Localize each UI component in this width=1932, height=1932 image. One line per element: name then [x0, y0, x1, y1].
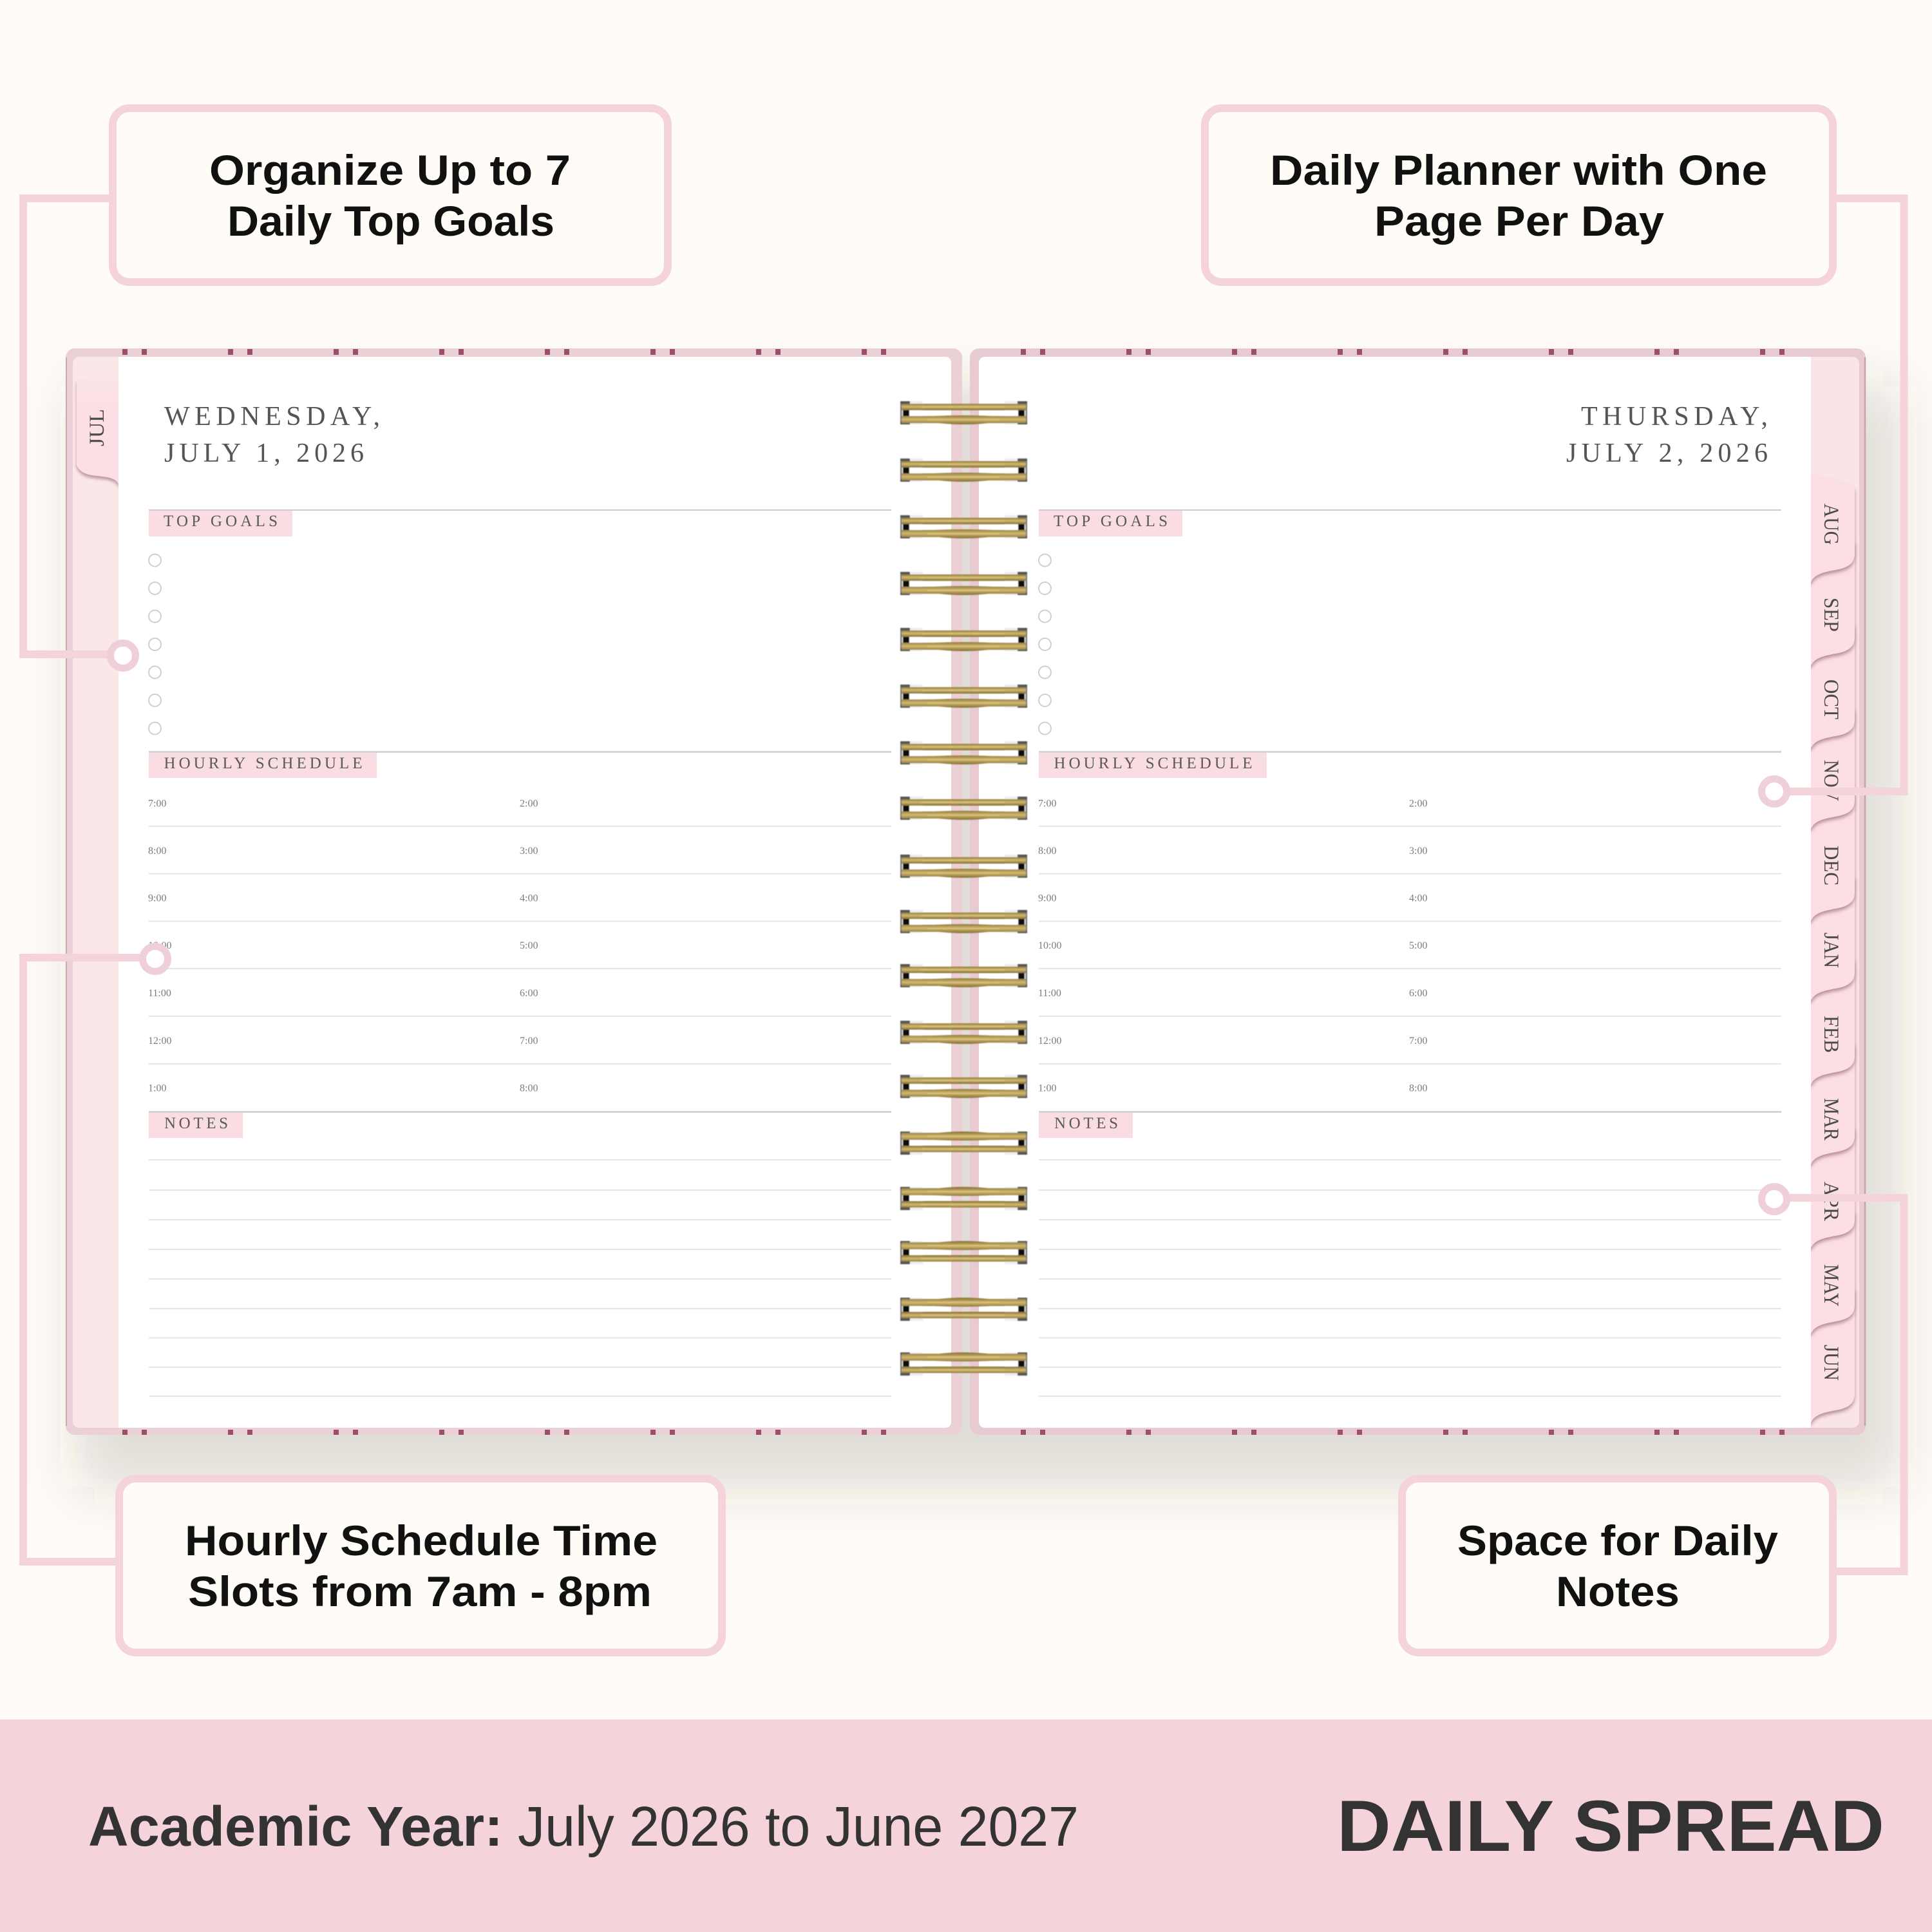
connector: hourly schedule callout to time slots [23, 947, 167, 1562]
tab labels: OCT [1819, 679, 1842, 719]
section: hourly schedule [148, 752, 891, 1094]
callout: top goals: Daily Top Goals [227, 197, 554, 245]
tab: JAN [1806, 876, 1855, 1001]
right tab strip [1803, 357, 1859, 1428]
section: hourly schedule: 2:00 [1409, 799, 1427, 809]
date heading: THURSDAY, [1581, 402, 1768, 431]
section: hourly schedule: 8:00 [1409, 1083, 1427, 1094]
section: hourly schedule: 6:00 [520, 988, 538, 999]
date heading: JULY 1, 2026 [164, 439, 364, 468]
month tabs [1806, 475, 1855, 1423]
tab: AUG [1806, 475, 1855, 582]
left tab strip [73, 357, 129, 1428]
callout: daily planner: Page Per Day [1374, 197, 1664, 245]
date heading: WEDNESDAY, [164, 402, 380, 431]
section: hourly schedule: 5:00 [1409, 940, 1427, 951]
tab labels: MAR [1819, 1098, 1842, 1141]
left cover [66, 348, 962, 1435]
stitching: left cover [122, 352, 886, 1432]
right sheet [979, 357, 1811, 1428]
section: notes: NOTES [164, 1115, 228, 1132]
tab: MAY [1806, 1211, 1855, 1334]
section: hourly schedule: 4:00 [1409, 893, 1427, 904]
section: hourly schedule: 7:00 [1409, 1036, 1427, 1046]
connector: daily planner callout to page [1762, 198, 1904, 804]
tab labels: JAN [1819, 933, 1842, 968]
section: hourly schedule: 9:00 [148, 893, 166, 904]
title: daily spread: DAILY SPREAD [1337, 1786, 1884, 1866]
stitching: right cover [1021, 352, 1785, 1432]
section: hourly schedule: 10:00 [148, 940, 171, 951]
section: hourly schedule: 5:00 [520, 940, 538, 951]
section: hourly schedule: 11:00 [1038, 988, 1061, 999]
section: top goals: TOP GOALS [1054, 513, 1168, 530]
callout: top goals: Organize Up to 7 [209, 146, 571, 194]
section: hourly schedule: 2:00 [520, 799, 538, 809]
section: hourly schedule: 3:00 [520, 846, 538, 857]
right cover [970, 348, 1866, 1435]
section: top goals [149, 510, 891, 734]
section: hourly schedule [1038, 752, 1781, 1094]
tab: JUN [1806, 1288, 1855, 1423]
section: notes [149, 1112, 891, 1396]
callout: notes [1402, 1479, 1833, 1653]
section: hourly schedule: 11:00 [148, 988, 171, 999]
date heading [1566, 402, 1768, 468]
tab: MAR [1806, 1043, 1855, 1164]
tab labels: DEC [1819, 846, 1842, 886]
tab labels: APR [1819, 1182, 1842, 1221]
tab labels: SEP [1819, 598, 1842, 632]
section: hourly schedule: HOURLY SCHEDULE [164, 755, 362, 772]
section: hourly schedule: 7:00 [1038, 799, 1056, 809]
gold spiral binding [900, 401, 1027, 1376]
tab labels [1819, 504, 1842, 1381]
section: hourly schedule: 9:00 [1038, 893, 1056, 904]
section: top goals: TOP GOALS [164, 513, 278, 530]
section: hourly schedule: 12:00 [148, 1036, 171, 1046]
tab: SEP [1806, 541, 1855, 666]
callout: notes: Space for Daily [1457, 1517, 1778, 1564]
panel: left page of planner [66, 348, 962, 1435]
section: hourly schedule: 8:00 [520, 1083, 538, 1094]
academic year text [88, 1795, 1079, 1858]
academic year text: Academic Year: [88, 1795, 503, 1858]
section: notes [1039, 1112, 1781, 1396]
section: notes: NOTES [1054, 1115, 1118, 1132]
section: hourly schedule: 3:00 [1409, 846, 1427, 857]
callout: daily planner: Daily Planner with One [1270, 146, 1767, 194]
callout: hourly schedule: Hourly Schedule Time [185, 1517, 658, 1564]
tab: FEB [1806, 960, 1855, 1084]
footer band [0, 1719, 1932, 1932]
section: hourly schedule: 7:00 [148, 799, 166, 809]
tab label: JUL: JUL [86, 409, 109, 446]
tab: DEC [1806, 792, 1855, 921]
section: hourly schedule: 4:00 [520, 893, 538, 904]
date heading: JULY 2, 2026 [1566, 439, 1768, 468]
section: top goals [1039, 510, 1781, 734]
date heading [164, 402, 380, 468]
left sheet [118, 357, 951, 1428]
tab: OCT [1806, 625, 1855, 748]
connector: top goals callout to goals list [23, 198, 135, 668]
section: hourly schedule: 8:00 [148, 846, 166, 857]
academic year text: July 2026 to June 2027 [518, 1795, 1079, 1858]
callout: top goals [113, 108, 668, 282]
tab: APR [1806, 1127, 1855, 1248]
callout: daily planner [1205, 108, 1833, 282]
section: hourly schedule: 1:00 [148, 1083, 166, 1094]
callout: hourly schedule: Slots from 7am - 8pm [188, 1567, 652, 1615]
tab labels: NOV [1819, 760, 1842, 801]
tab labels: FEB [1819, 1016, 1842, 1053]
tab labels: MAY [1819, 1264, 1842, 1307]
callout: notes: Notes [1556, 1567, 1680, 1615]
connector: notes callout to notes area [1762, 1186, 1904, 1571]
tab labels: JUN [1819, 1345, 1842, 1381]
section: hourly schedule: HOURLY SCHEDULE [1054, 755, 1252, 772]
section: hourly schedule: 7:00 [520, 1036, 538, 1046]
section: hourly schedule: 10:00 [1038, 940, 1061, 951]
book shadow [77, 386, 1900, 1488]
section: hourly schedule: 6:00 [1409, 988, 1427, 999]
tab: JUL shape [77, 372, 120, 486]
tab labels: AUG [1819, 504, 1842, 545]
panel: right page of planner [970, 348, 1866, 1435]
tab: NOV [1806, 708, 1855, 829]
section: hourly schedule: 8:00 [1038, 846, 1056, 857]
section: hourly schedule: 12:00 [1038, 1036, 1061, 1046]
callout: hourly schedule [119, 1479, 722, 1653]
section: hourly schedule: 1:00 [1038, 1083, 1056, 1094]
